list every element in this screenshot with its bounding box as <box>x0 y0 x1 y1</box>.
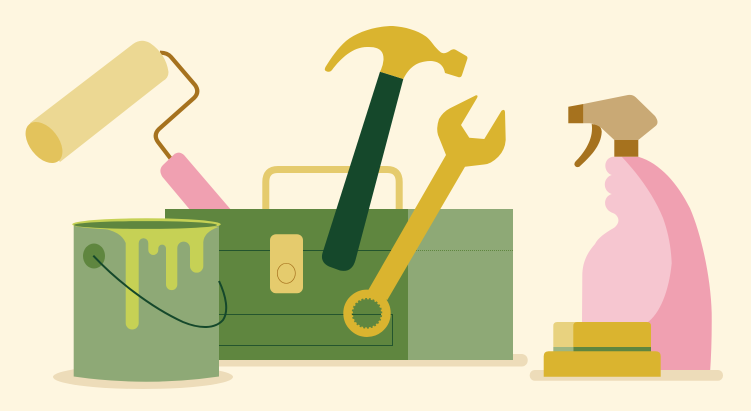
wrench <box>348 95 506 333</box>
sponge light stripe <box>553 347 573 352</box>
bucket wire handle <box>93 256 226 327</box>
bucket body <box>74 224 219 382</box>
bottle front highlight <box>582 157 672 323</box>
toolbox dark front panel <box>165 209 408 360</box>
bucket rim <box>72 218 221 230</box>
wrench ring <box>348 294 386 333</box>
toolbox light side panel <box>408 209 513 360</box>
paint bucket <box>53 218 233 389</box>
sponge green stripe <box>573 347 651 352</box>
toolbox carrying handle <box>266 170 399 210</box>
roller end cap <box>18 115 70 170</box>
toolbox ground shadow <box>150 354 528 366</box>
sponge upper top <box>573 322 651 347</box>
sprayer neck <box>614 140 638 157</box>
bucket ground shadow <box>53 365 233 389</box>
toolbox lid seam <box>165 250 408 252</box>
sponge ground shadow <box>530 370 723 381</box>
sprayer nozzle <box>568 104 583 123</box>
bucket opening <box>74 221 217 229</box>
dripping paint <box>100 227 218 330</box>
roller pink handle <box>160 153 232 211</box>
toolbox lower compartment <box>165 314 392 346</box>
toolbox <box>150 170 528 366</box>
hammer <box>322 26 467 271</box>
bucket handle knob <box>83 244 105 268</box>
roller wire frame <box>156 53 197 159</box>
sponge upper light side <box>553 322 578 347</box>
bottle back shading <box>622 157 712 374</box>
hammer head <box>325 26 467 79</box>
roller cylinder <box>30 41 168 162</box>
toolbox side seam <box>408 250 513 252</box>
wrench ring teeth <box>352 298 382 328</box>
sponge stack <box>530 322 723 381</box>
hammer handle <box>322 72 403 271</box>
wrench head and shaft <box>368 95 506 300</box>
paint roller <box>18 41 232 211</box>
spray bottle <box>568 95 712 373</box>
sprayer head <box>583 95 658 140</box>
sprayer trigger <box>574 124 602 167</box>
toolbox latch <box>270 234 303 293</box>
sponge lower block <box>544 351 661 377</box>
